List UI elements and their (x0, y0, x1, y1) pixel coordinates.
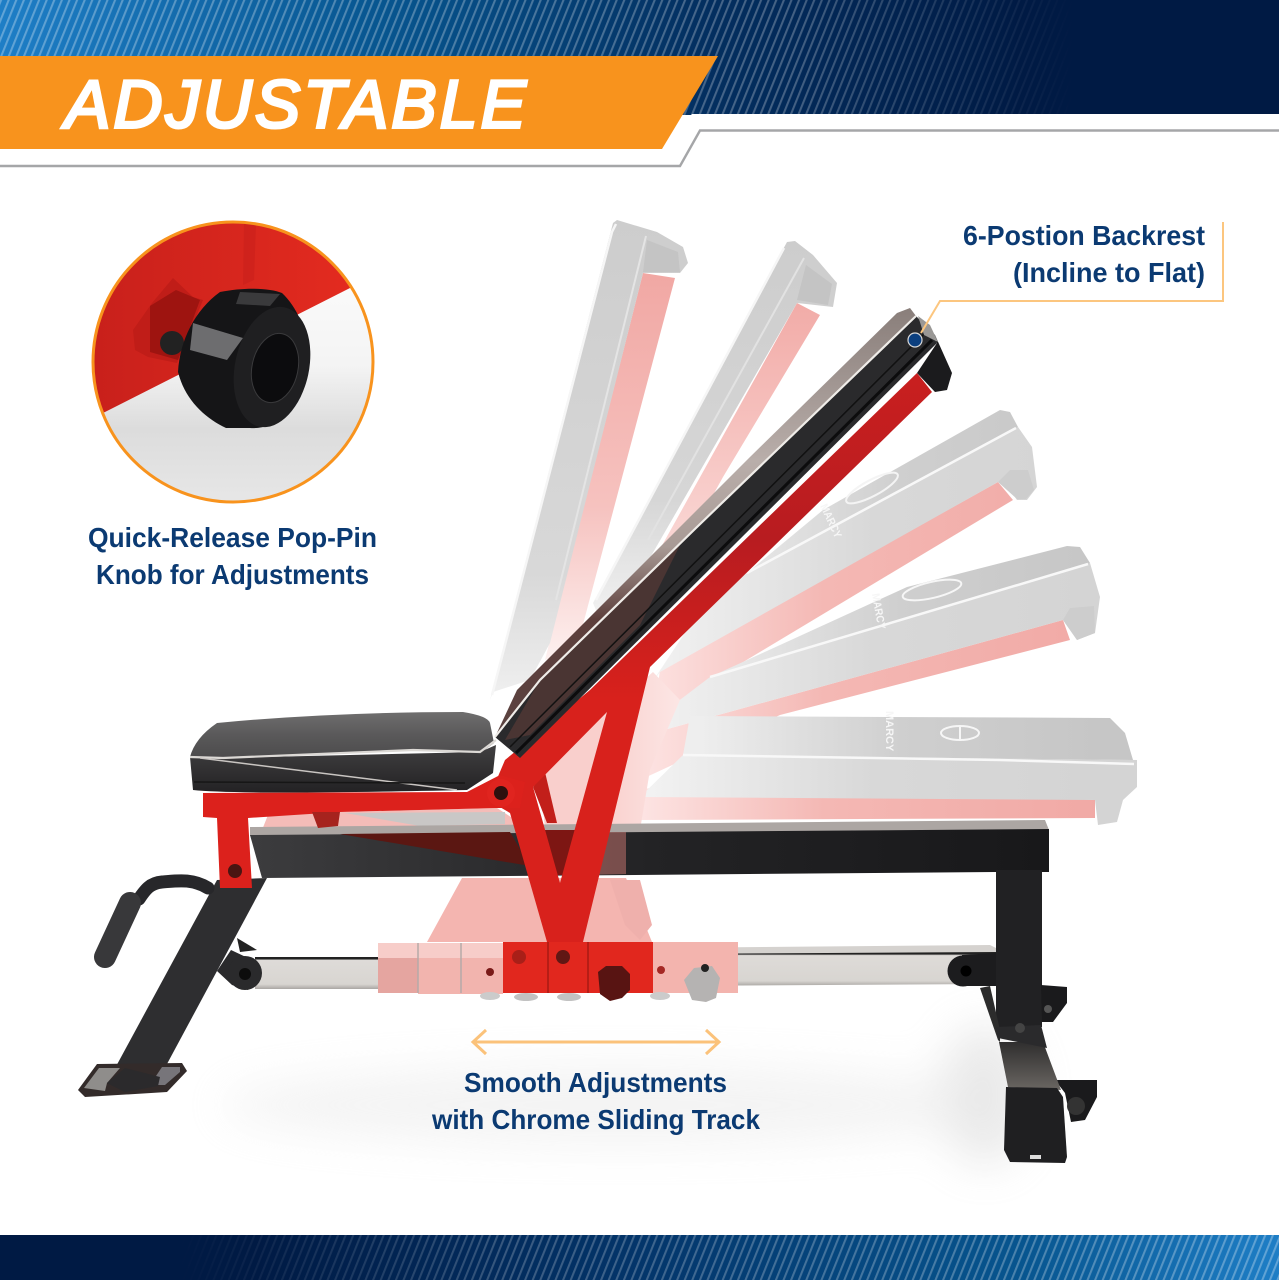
caption: quick-release knob: Quick-Release Pop-Pin (88, 522, 377, 553)
title: ADJUSTABLE (61, 66, 527, 142)
ghost knobs (480, 964, 720, 1002)
backrest end cap (916, 316, 952, 392)
rear caster upper (1041, 985, 1067, 1022)
caption: chrome sliding track: with Chrome Sliding Track (431, 1104, 760, 1135)
caption: quick-release knob (88, 522, 377, 590)
double-headed arrow (473, 1030, 719, 1054)
ghost logo text: MARCY (817, 502, 843, 540)
rear caster lower (1055, 1080, 1097, 1122)
rail bracket (217, 938, 262, 990)
ghost backrest: fifth position (640, 546, 1100, 780)
main frame bar (250, 820, 1049, 878)
right chrome rail (652, 945, 996, 986)
white band and grey outline under the banner (0, 114, 1279, 166)
top banner background (0, 0, 1279, 115)
front leg (78, 878, 267, 1097)
handle bar (105, 881, 208, 957)
caption: backrest positions: (Incline to Flat) (1013, 257, 1205, 288)
ghost backrest: second position (593, 241, 837, 620)
ghost logo text: MARCY (869, 593, 887, 630)
rail bracket (948, 953, 996, 986)
red support strut and backrest frame (488, 373, 932, 942)
ghost backrest: fourth position (647, 410, 1037, 705)
lock nut (133, 278, 203, 363)
caption: chrome sliding track: Smooth Adjustments (464, 1067, 727, 1098)
active backrest pad (495, 308, 952, 758)
knob face (234, 307, 310, 428)
foot plate (78, 1063, 187, 1097)
caption: backrest positions (963, 220, 1205, 288)
bottom banner (0, 1235, 1279, 1280)
left chrome rail (217, 938, 380, 990)
caption: quick-release knob: Knob for Adjustments (96, 559, 369, 590)
ghost backrest: steepest position (490, 220, 688, 700)
ghost slider sleeves (378, 942, 738, 1002)
floor shadow (220, 1025, 1030, 1165)
seat pad (190, 712, 496, 792)
adjustment knob (598, 966, 630, 1001)
red seat frame and bracket (203, 775, 525, 888)
ghost logo text: MARCY (883, 711, 895, 752)
knob body (178, 289, 307, 428)
red sliding sleeve (503, 942, 653, 1001)
ghost strut fan (262, 672, 680, 942)
title ribbon (0, 56, 718, 149)
rear leg and base (980, 870, 1097, 1163)
ghost backrest: flat position (640, 711, 1137, 825)
caption: backrest positions: 6-Postion Backrest (963, 220, 1205, 251)
caption: chrome sliding track (431, 1067, 760, 1135)
inset detail: quick-release knob (90, 215, 380, 510)
callout leader line (908, 222, 1223, 347)
